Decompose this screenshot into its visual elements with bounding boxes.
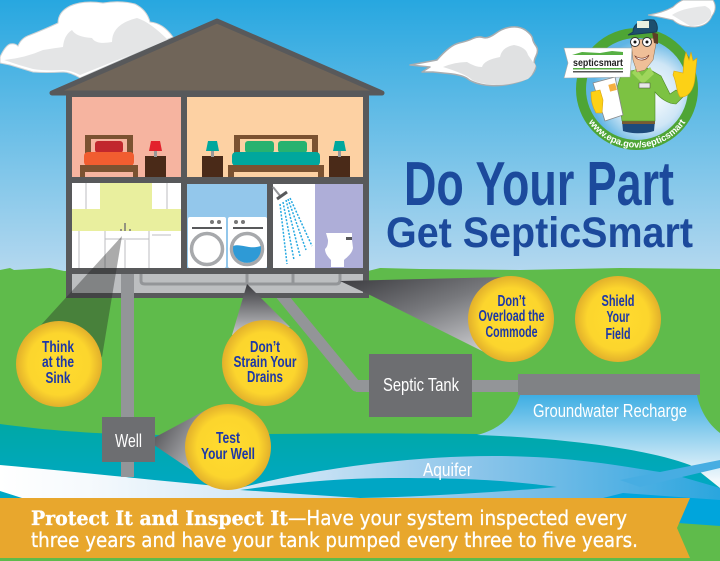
banner text xyxy=(31,506,638,552)
title xyxy=(386,150,693,257)
aquifer crossing ribbon xyxy=(620,460,720,487)
cloud left shade xyxy=(4,18,168,75)
yellow circle: Don't Overload the Commode: Don’t xyxy=(498,293,526,310)
mascot glasses xyxy=(630,38,652,46)
banner text: Protect It and Inspect It xyxy=(31,506,289,530)
yellow circle: Don't Strain Your Drains xyxy=(222,320,308,406)
yellow circle: Don't Strain Your Drains: Drains xyxy=(247,369,283,386)
badge: SepticSmart mascot: www.epa.gov/septicsmart xyxy=(589,119,686,148)
yellow circle: Shield Your Field: Field xyxy=(606,326,630,343)
aquifer stream xyxy=(0,456,720,500)
name tag xyxy=(639,83,650,88)
pointer: Test Your Well xyxy=(148,410,206,476)
septic tank box xyxy=(369,354,472,417)
nightstand and lamp xyxy=(145,156,166,177)
house xyxy=(52,21,382,298)
toilet xyxy=(325,233,353,267)
yellow circle: Don't Strain Your Drains: Strain Your xyxy=(234,354,296,371)
mascot trousers xyxy=(622,120,655,133)
bedroom right xyxy=(187,97,363,177)
yellow circle: Test Your Well: Test xyxy=(216,430,240,447)
mascot neck and face xyxy=(631,38,657,72)
yellow circle: Shield Your Field: Your xyxy=(606,309,630,326)
drain field bar xyxy=(518,374,700,395)
yellow circle: Shield Your Field: Shield xyxy=(602,293,634,310)
yellow circle: Think at the Sink: Sink xyxy=(46,370,71,387)
aquifer label: Aquifer xyxy=(423,460,472,480)
cloud left xyxy=(0,2,173,78)
cloud centre shade xyxy=(443,45,536,85)
septic tank box: Septic Tank xyxy=(383,375,460,395)
crawl space xyxy=(72,274,363,293)
pipe: tank to field xyxy=(356,380,521,392)
mascot collar xyxy=(632,67,654,84)
yellow circle: Don't Overload the Commode xyxy=(468,276,554,362)
pointer: Don't Strain xyxy=(232,284,290,335)
yellow circle: Think at the Sink: at the xyxy=(42,354,74,371)
yellow circle: Test Your Well: Your Well xyxy=(201,446,255,463)
pipe: well line xyxy=(121,274,134,477)
mascot smile xyxy=(635,55,649,60)
yellow circle: Think at the Sink xyxy=(16,321,102,407)
lower blue water xyxy=(603,493,720,526)
cloud right xyxy=(648,0,715,27)
well box: Well xyxy=(115,431,142,451)
yellow circle: Don't Overload the Commode: Commode xyxy=(486,324,538,341)
mascot glove right xyxy=(673,52,697,97)
bathroom xyxy=(273,184,363,268)
yellow circle: Don't Overload the Commode: Overload the xyxy=(478,308,545,325)
cloud centre xyxy=(410,27,538,86)
septicsmart flag: septicsmart xyxy=(573,57,623,69)
mascot cap xyxy=(628,20,657,35)
badge url xyxy=(582,110,692,148)
mascot hair xyxy=(652,32,658,44)
teal wedge in aquifer xyxy=(240,478,557,498)
mascot shirt xyxy=(600,68,684,121)
clipboard xyxy=(593,77,623,121)
groundwater: teal band xyxy=(0,424,720,523)
title: Get SepticSmart xyxy=(386,209,693,257)
grass xyxy=(0,268,720,561)
sky background xyxy=(0,0,720,272)
banner xyxy=(0,498,690,558)
roof xyxy=(52,21,382,93)
pointer: Don't Overload xyxy=(340,277,505,355)
cap patch xyxy=(637,21,649,28)
yellow circle: Test Your Well xyxy=(185,404,271,490)
yellow circle: Think at the Sink: Think xyxy=(42,339,74,356)
groundwater recharge label: Groundwater Recharge xyxy=(533,401,687,421)
groundwater recharge xyxy=(477,395,720,488)
pipe: septic line xyxy=(273,285,356,386)
banner text: —Have your system inspected every xyxy=(288,506,627,530)
bed xyxy=(85,135,133,159)
pointer: Think at the Sink xyxy=(41,236,122,357)
kitchen xyxy=(72,183,181,268)
yellow circle: Don't Strain Your Drains: Don’t xyxy=(250,339,280,356)
yellow circle: Shield Your Field xyxy=(575,276,661,362)
banner text: three years and have your tank pumped every three to five years. xyxy=(31,528,638,552)
well box xyxy=(102,417,155,462)
bedroom left xyxy=(72,97,181,177)
mascot glove left xyxy=(591,90,603,113)
laundry room xyxy=(187,184,267,268)
cloud right shade xyxy=(672,6,711,26)
badge: SepticSmart mascot xyxy=(564,19,698,150)
house frame xyxy=(66,94,369,298)
shower xyxy=(273,187,281,197)
